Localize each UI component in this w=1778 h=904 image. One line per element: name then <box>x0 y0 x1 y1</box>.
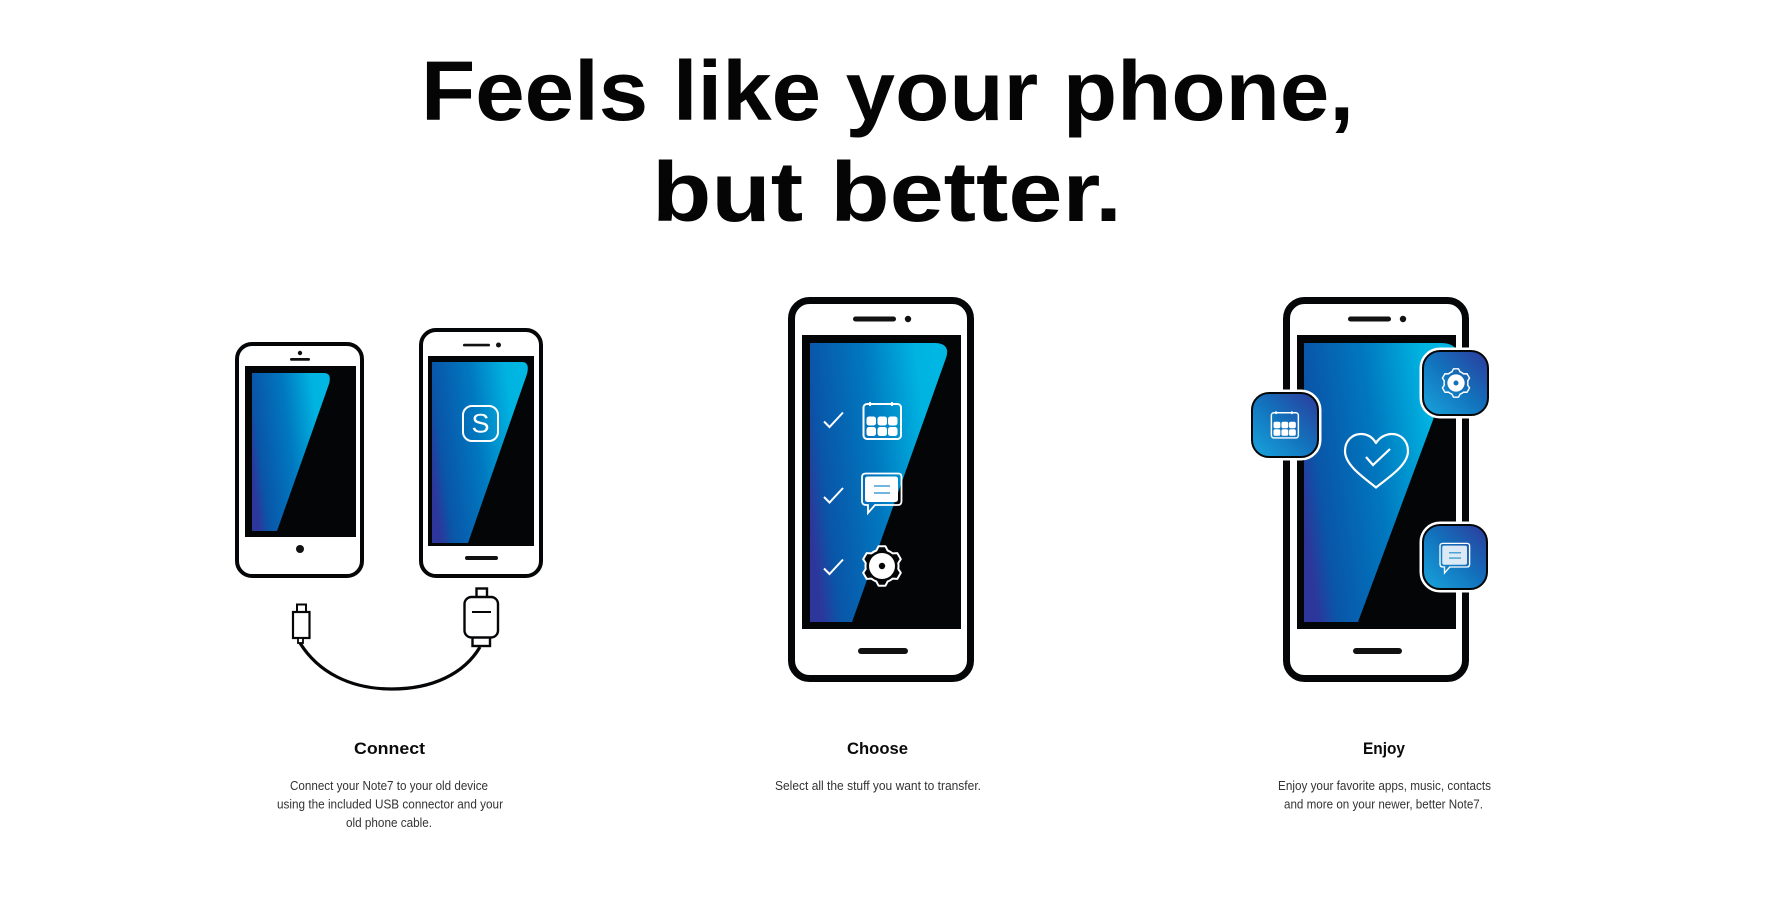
panel: enjoy illustration <box>1251 300 1489 678</box>
caption: connect: Connect <box>354 740 426 758</box>
caption: choose: Choose <box>847 740 908 758</box>
old phone <box>237 344 362 576</box>
icon: gear <box>863 546 901 586</box>
usb cable <box>293 588 498 689</box>
panel: connect illustration <box>237 330 541 689</box>
app tile: message <box>1422 524 1488 590</box>
icon: message <box>862 474 902 513</box>
caption: enjoy: Enjoy <box>1363 740 1406 758</box>
caption: connect: Connect your Note7 to your old device <box>290 779 488 793</box>
caption: choose <box>775 740 981 793</box>
caption: connect <box>277 740 503 830</box>
icon: Samsung Smart Switch S: S <box>471 408 490 438</box>
caption: choose: Select all the stuff you want to transfer. <box>775 779 981 793</box>
icon: heart with check <box>1345 434 1408 488</box>
caption: enjoy: Enjoy your favorite apps, music, contacts <box>1278 779 1491 793</box>
caption: enjoy: and more on your newer, better Note7. <box>1284 798 1483 812</box>
check marks <box>824 412 843 574</box>
caption: enjoy <box>1278 740 1491 812</box>
new phone <box>421 330 541 576</box>
app tile: calendar <box>1251 392 1319 458</box>
phone body <box>792 300 970 678</box>
caption: connect: using the included USB connector and your <box>277 798 503 812</box>
panel: choose illustration <box>792 300 970 678</box>
caption: connect: old phone cable. <box>346 816 432 830</box>
app tile: settings gear <box>1422 350 1489 416</box>
title <box>421 44 1354 239</box>
icon: calendar <box>864 402 901 439</box>
icon: Samsung Smart Switch S <box>463 406 498 441</box>
title: but better. <box>652 145 1122 239</box>
title: Feels like your phone, <box>421 44 1354 138</box>
phone body <box>1286 300 1466 678</box>
